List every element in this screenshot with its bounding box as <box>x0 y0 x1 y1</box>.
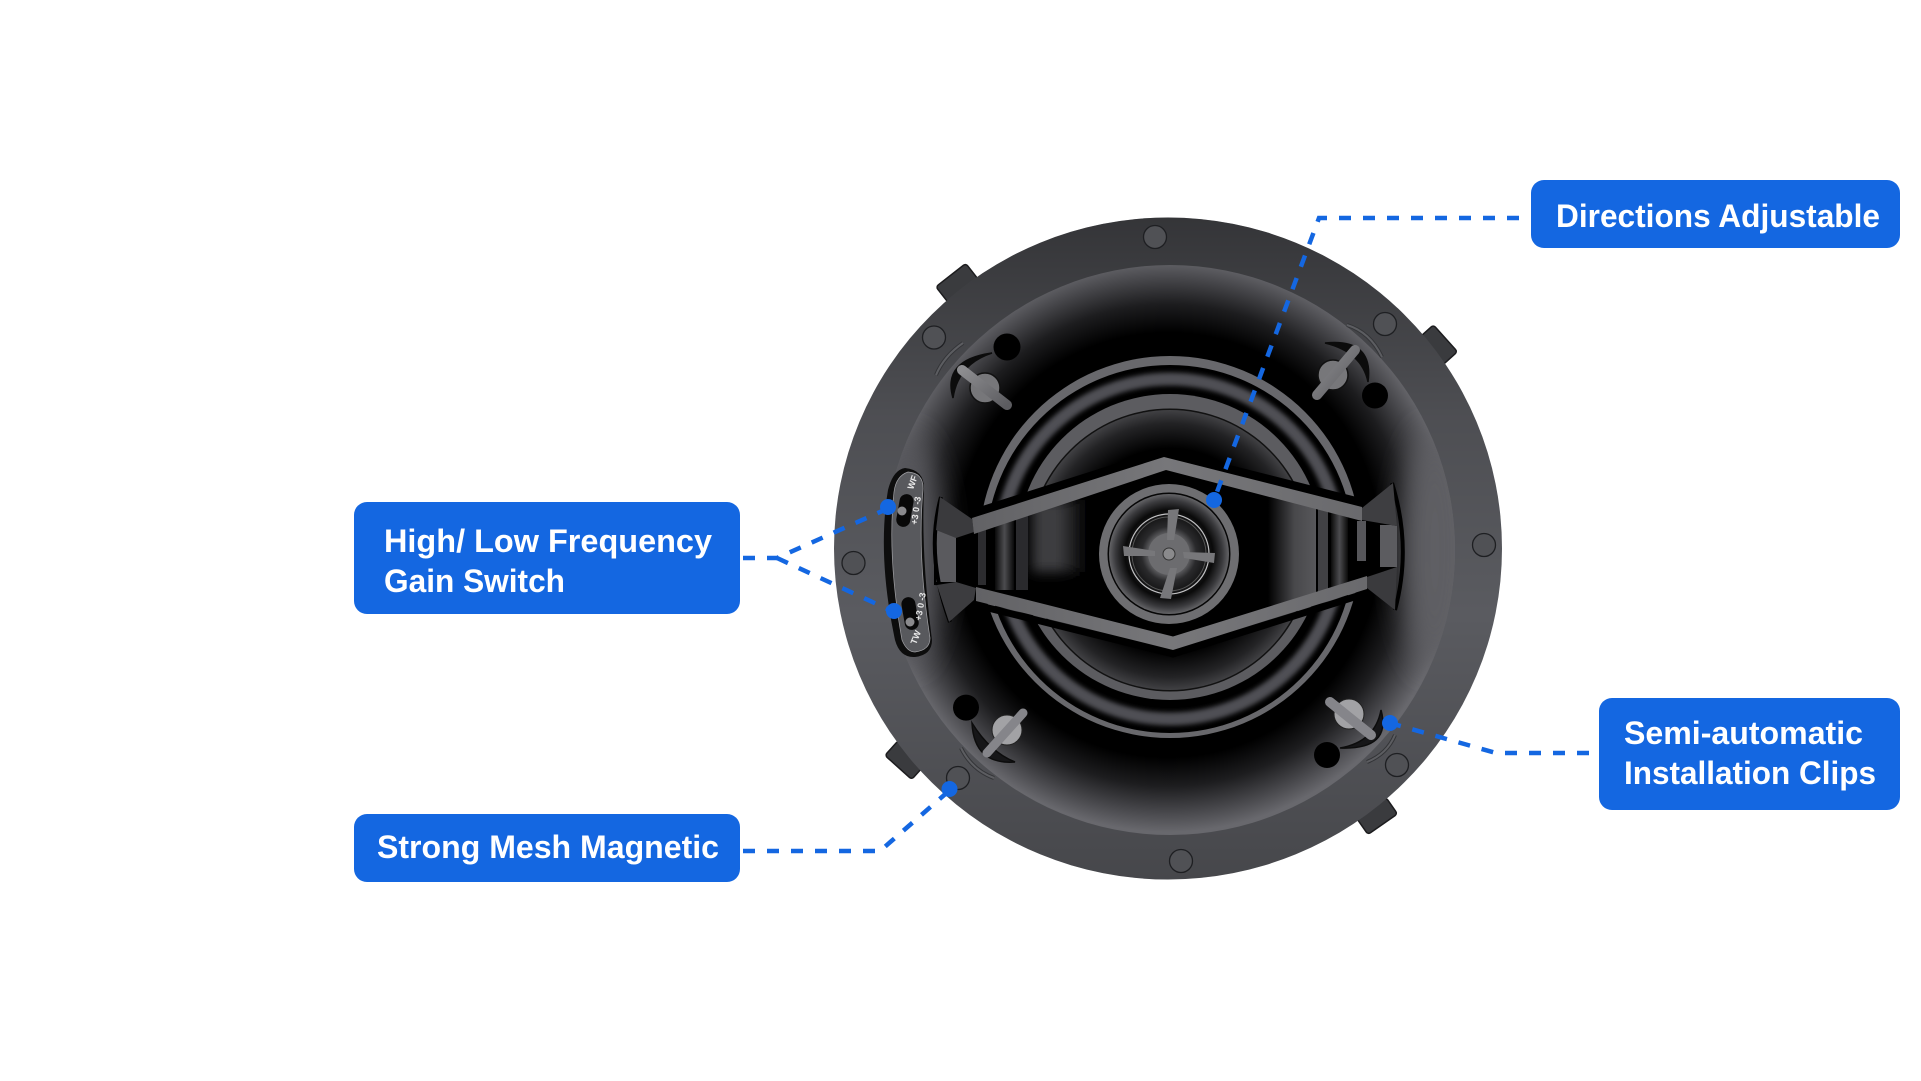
mounting tabs <box>885 263 1457 835</box>
holes <box>953 334 1388 768</box>
bracket edge arcs <box>1392 483 1403 610</box>
callout: strong mesh magnetic: Strong Mesh Magnetic <box>377 829 719 865</box>
leader: directions <box>1206 218 1519 508</box>
leader: gain switch <box>743 499 902 619</box>
inner funnel <box>874 265 1469 835</box>
installation clips <box>936 325 1395 778</box>
tweeter <box>1099 484 1239 624</box>
top strap <box>972 457 1362 534</box>
switch: woofer: WF <box>905 474 920 491</box>
switch: woofer <box>895 474 923 528</box>
clip upper right <box>1317 325 1382 395</box>
callout: semi-automatic installation clips <box>1599 698 1900 810</box>
callout: directions adjustable <box>1531 180 1900 248</box>
callout: directions adjustable: Directions Adjustable <box>1556 198 1880 234</box>
woofer cone and surround <box>979 356 1361 738</box>
callout: high/low frequency gain switch: Gain Switch <box>384 563 565 599</box>
screw caps <box>842 226 1496 872</box>
speaker <box>834 218 1502 880</box>
grille bridge <box>934 453 1403 654</box>
side brackets <box>936 497 974 538</box>
leader: installation clips <box>1382 715 1589 753</box>
clip lower left <box>961 713 1023 778</box>
callout: semi-automatic installation clips: Installation Clips <box>1624 755 1876 791</box>
callout: strong mesh magnetic <box>354 814 740 882</box>
clip lower right <box>1330 699 1395 762</box>
switch: tweeter: +3 0 -3 <box>913 592 928 621</box>
callout: high/low frequency gain switch: High/ Low Frequency <box>384 523 712 559</box>
gain switch plate <box>884 468 932 657</box>
bottom strap <box>976 576 1367 650</box>
outer flange <box>834 218 1502 880</box>
callout: high/low frequency gain switch <box>354 502 740 614</box>
switch: tweeter: TW <box>909 629 923 646</box>
leader: mesh magnetic <box>743 781 958 851</box>
callout: semi-automatic installation clips: Semi-automatic <box>1624 715 1863 751</box>
switch: woofer: +3 0 -3 <box>909 496 923 525</box>
strap shadows <box>972 453 1362 514</box>
switch: tweeter <box>900 592 928 646</box>
clip upper left <box>936 343 1007 405</box>
